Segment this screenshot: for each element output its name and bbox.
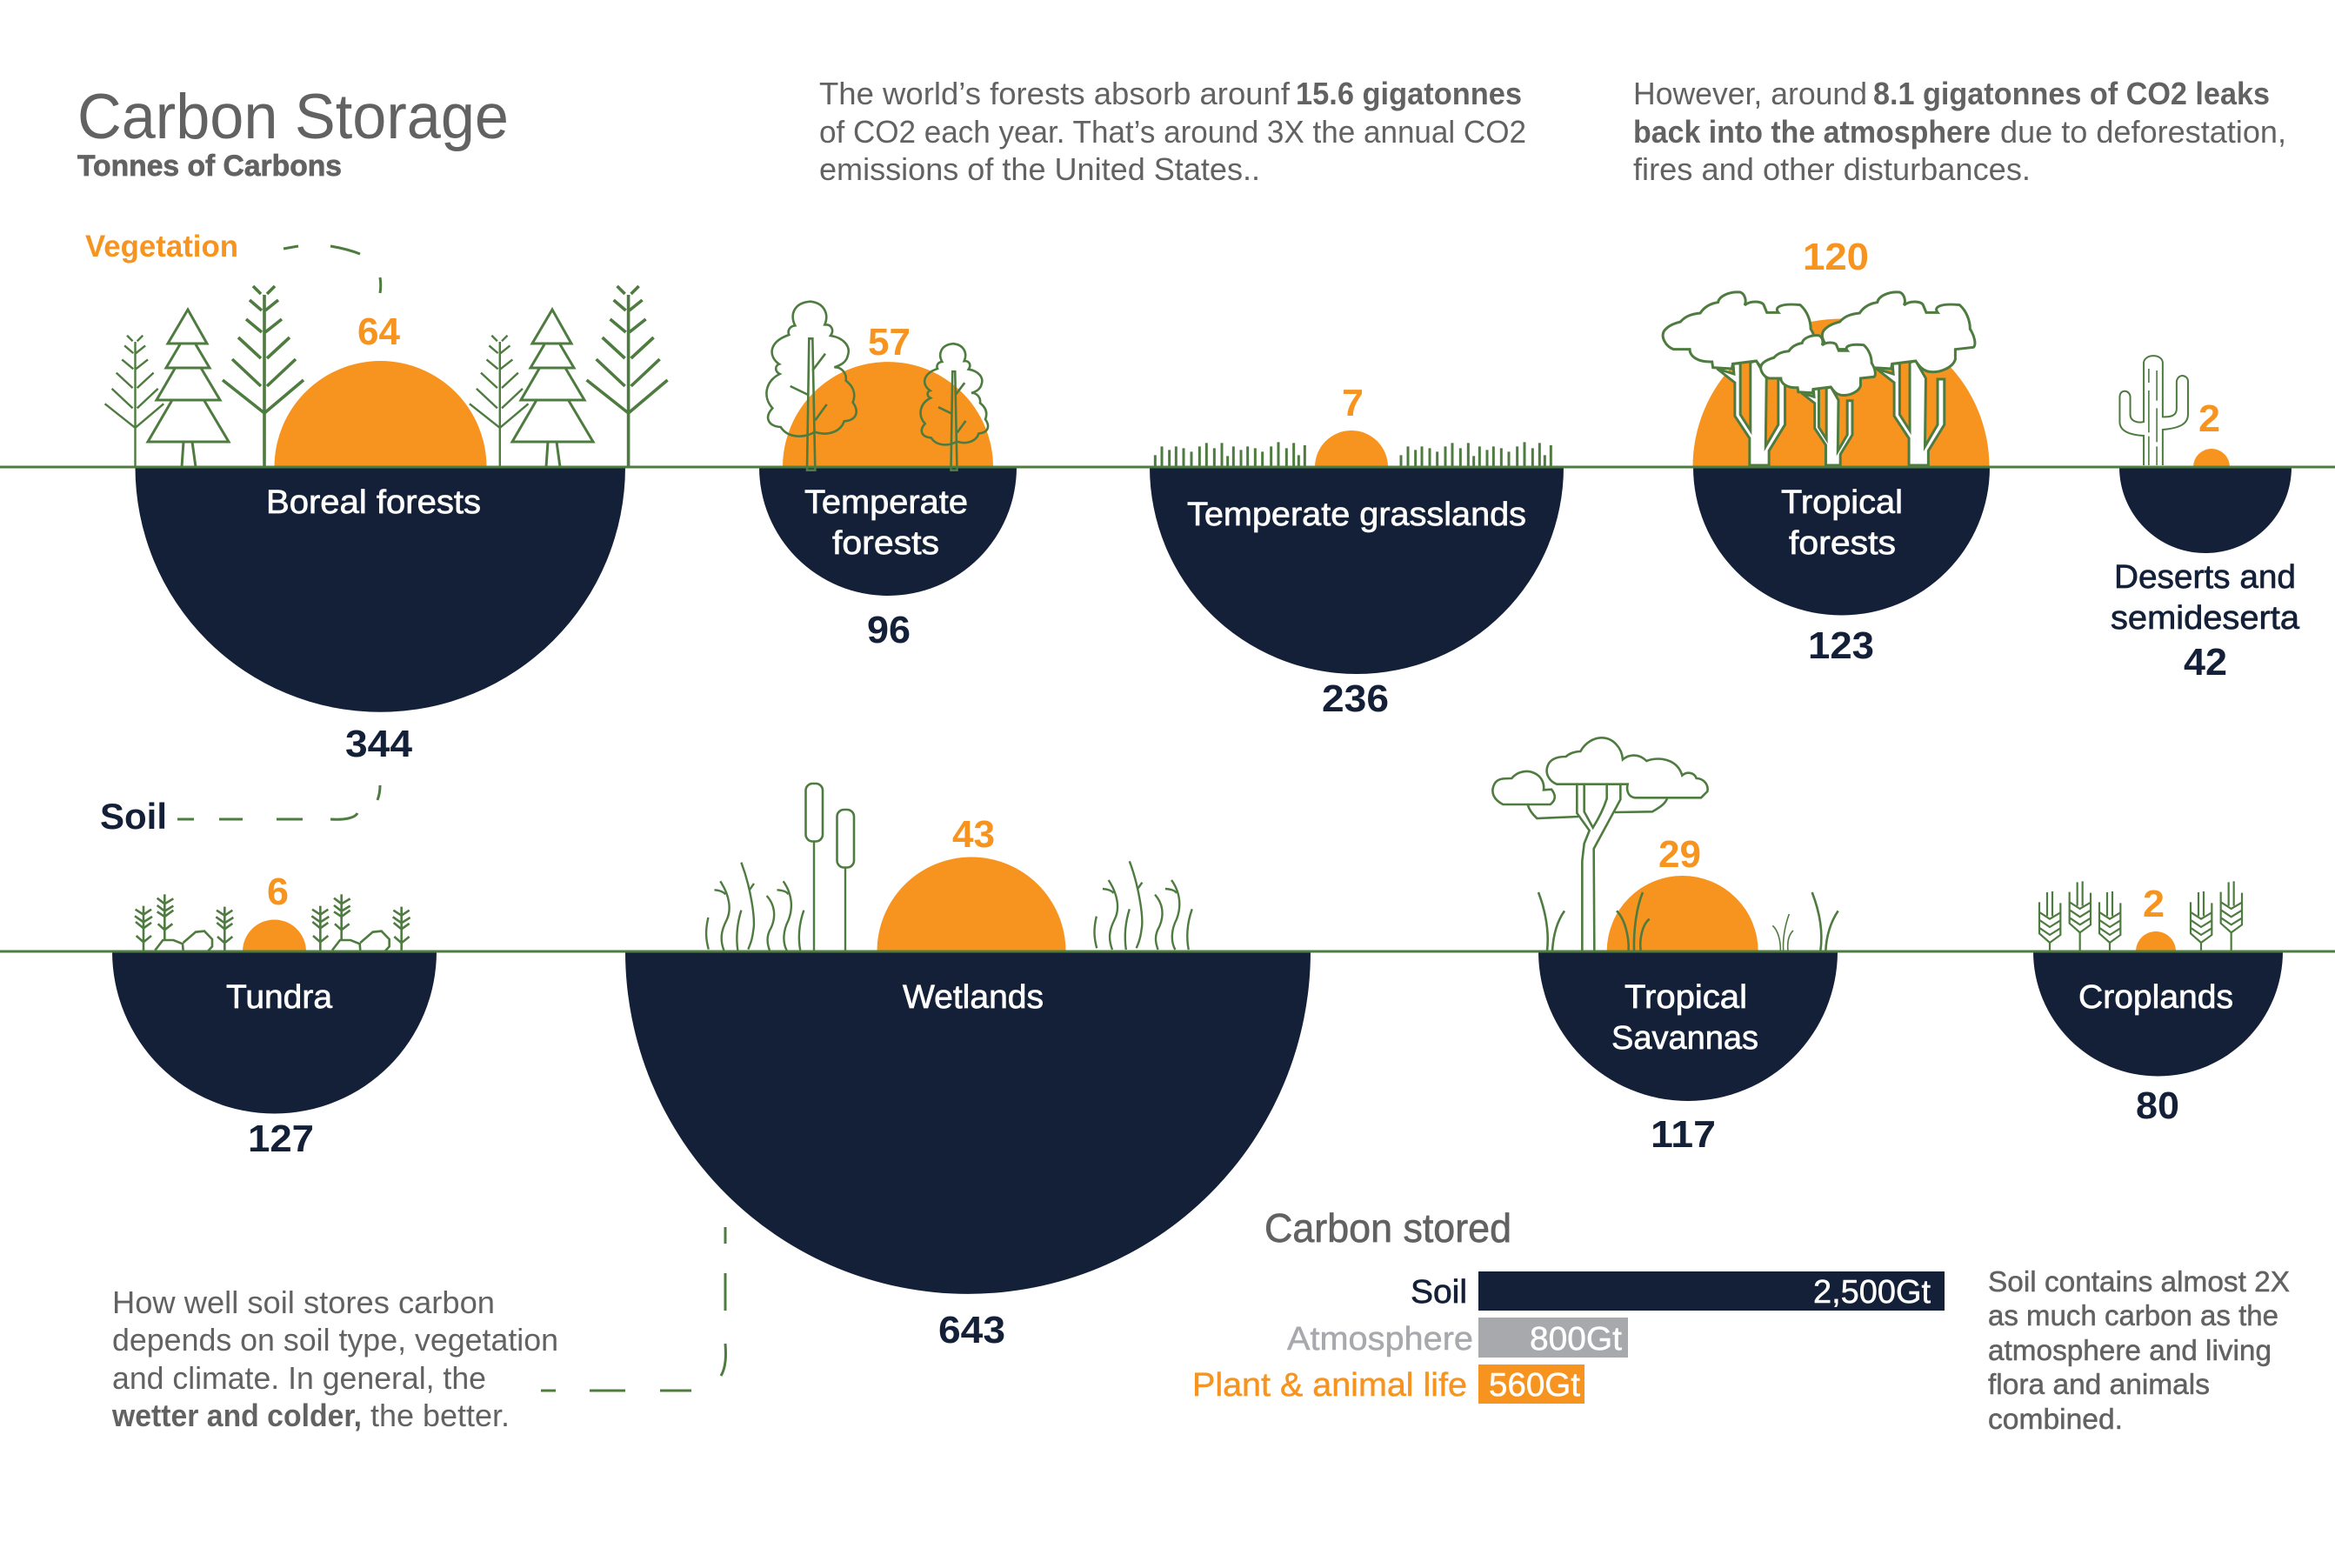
- bar: soil: 2,500Gt: [1813, 1274, 1931, 1311]
- text block: carbon leaks: 8.1 gigatonnes of CO2 leaks: [1873, 76, 2270, 111]
- icon: wheat: [2039, 881, 2242, 951]
- icon: temperate trees: [766, 302, 988, 470]
- name: [1611, 979, 1758, 1057]
- text block: soil note: [111, 1284, 558, 1433]
- text block: soil note: the better.: [370, 1398, 510, 1433]
- bar: soil: Soil: [1411, 1274, 1467, 1311]
- vegetation semicircle: [2193, 449, 2230, 467]
- name: Temperate: [804, 484, 968, 521]
- connector: soil note to wetlands: [541, 1227, 725, 1391]
- ground line: row two: [0, 950, 2335, 953]
- vegetation semicircle: [1607, 876, 1758, 951]
- icon: tropical trees: [1663, 292, 1975, 465]
- panel: boreal forests: [105, 286, 668, 765]
- icon: cactus: [2119, 356, 2188, 465]
- text block: soil note: depends on soil type, vegetation: [112, 1322, 558, 1358]
- connector: vegetation to boreal orange: [284, 246, 381, 293]
- panel: croplands: [2033, 881, 2283, 1127]
- vegetation value: 7: [1342, 382, 1364, 424]
- soil value: 236: [1322, 677, 1389, 720]
- text block: soil comparison: combined.: [1988, 1403, 2123, 1435]
- soil value: 123: [1808, 624, 1874, 667]
- vegetation value: 43: [952, 813, 995, 856]
- soil semicircle: [1693, 467, 1990, 616]
- name: Tropical: [1781, 484, 1903, 521]
- name: Tundra: [226, 979, 333, 1016]
- subtitle: Tonnes of Carbons: [77, 150, 342, 183]
- soil semicircle: [625, 951, 1311, 1294]
- chart heading: Carbon stored: [1264, 1205, 1511, 1251]
- vegetation semicircle: [2136, 931, 2176, 951]
- text block: forests absorb: [819, 76, 1526, 187]
- soil value: 127: [248, 1118, 314, 1160]
- vegetation value: 2: [2198, 397, 2220, 440]
- bar: plant and animal life: 560Gt: [1489, 1367, 1580, 1404]
- panel: temperate forests: [759, 302, 1017, 651]
- name: [804, 484, 968, 562]
- legend label: vegetation: Vegetation: [85, 230, 238, 264]
- panel: deserts: [2111, 356, 2300, 684]
- vegetation semicircle: [1692, 319, 1990, 467]
- text block: soil comparison: flora and animals: [1988, 1368, 2210, 1400]
- vegetation value: 6: [267, 871, 289, 913]
- panel: temperate grasslands: [1150, 382, 1564, 720]
- vegetation value: 120: [1803, 236, 1869, 278]
- name: [1781, 484, 1903, 562]
- soil value: 344: [345, 723, 413, 765]
- vegetation semicircle: [877, 857, 1066, 951]
- vegetation semicircle: [243, 920, 306, 951]
- vegetation semicircle: [275, 361, 487, 467]
- name: Wetlands: [903, 979, 1044, 1016]
- text block: forests absorb: of CO2 each year. That’s around 3X the annual CO2: [819, 114, 1526, 150]
- name: Tropical: [1624, 979, 1747, 1016]
- soil semicircle: [112, 951, 437, 1113]
- chart: carbon stored: [1192, 1205, 1945, 1404]
- text block: carbon leaks: [1633, 76, 2286, 187]
- vegetation value: 29: [1658, 833, 1701, 876]
- name: Croplands: [2078, 979, 2233, 1016]
- vegetation semicircle: [783, 362, 993, 467]
- icon: tundra plants and rocks: [135, 894, 410, 952]
- panel: tundra: [112, 871, 437, 1160]
- vegetation value: 57: [868, 321, 911, 364]
- text block: carbon leaks: back into the atmosphere: [1633, 114, 1991, 150]
- soil value: 80: [2136, 1084, 2179, 1127]
- vegetation value: 64: [357, 310, 401, 353]
- vegetation value: 2: [2143, 883, 2165, 925]
- text block: forests absorb: emissions of the United States..: [819, 151, 1260, 187]
- title: Carbon Storage: [77, 82, 509, 152]
- text block: soil comparison: atmosphere and living: [1988, 1334, 2272, 1366]
- soil value: 643: [938, 1309, 1005, 1351]
- name: forests: [1789, 525, 1896, 562]
- soil value: 42: [2184, 641, 2227, 684]
- bar: atmosphere: Atmosphere: [1287, 1321, 1473, 1358]
- bar: atmosphere: 800Gt: [1530, 1321, 1622, 1358]
- text block: soil note: wetter and colder,: [111, 1398, 362, 1433]
- name: Deserts and: [2114, 559, 2296, 596]
- bar: soil: [1411, 1271, 1945, 1311]
- name: semideserta: [2111, 600, 2300, 637]
- soil semicircle: [1150, 467, 1564, 674]
- soil semicircle: [759, 467, 1017, 596]
- vegetation semicircle: [1315, 430, 1388, 467]
- panel: wetlands: [625, 784, 1311, 1351]
- icon: grass ticks: [1155, 442, 1551, 467]
- bar: plant and animal life: [1192, 1364, 1584, 1404]
- panel: tropical savannas: [1492, 737, 1838, 1156]
- soil semicircle: [2033, 951, 2283, 1077]
- panel: tropical forests: [1663, 236, 1990, 667]
- text block: soil comparison: as much carbon as the: [1988, 1299, 2278, 1331]
- ground line: row one: [0, 466, 2335, 468]
- soil semicircle: [136, 467, 625, 712]
- soil semicircle: [1538, 951, 1838, 1101]
- bar: atmosphere: [1287, 1318, 1628, 1358]
- name: forests: [832, 525, 939, 562]
- soil value: 117: [1651, 1113, 1716, 1156]
- icon: reeds and cattails: [706, 784, 1192, 951]
- legend label: soil: Soil: [100, 796, 167, 837]
- text block: carbon leaks: fires and other disturbances.: [1633, 151, 2031, 187]
- text block: carbon leaks: However, around: [1633, 76, 1867, 111]
- name: [2111, 559, 2300, 637]
- icon: boreal trees: [105, 286, 668, 467]
- text block: soil comparison: [1988, 1265, 2290, 1435]
- soil semicircle: [2119, 467, 2292, 553]
- text block: soil note: and climate. In general, the: [112, 1360, 486, 1396]
- icon: savanna tree and grass: [1492, 737, 1838, 951]
- name: Savannas: [1611, 1020, 1758, 1057]
- connector: soil to boreal navy: [177, 785, 380, 819]
- text block: carbon leaks: due to deforestation,: [2000, 114, 2286, 150]
- text block: soil note: How well soil stores carbon: [112, 1284, 495, 1320]
- name: Boreal forests: [266, 484, 481, 521]
- text block: soil comparison: Soil contains almost 2X: [1988, 1265, 2290, 1298]
- text block: forests absorb: 15.6 gigatonnes: [1296, 76, 1522, 111]
- text block: forests absorb: The world’s forests absorb arounf: [819, 76, 1291, 111]
- soil value: 96: [867, 609, 911, 651]
- name: Temperate grasslands: [1187, 497, 1526, 533]
- bar: plant and animal life: Plant & animal life: [1192, 1367, 1467, 1404]
